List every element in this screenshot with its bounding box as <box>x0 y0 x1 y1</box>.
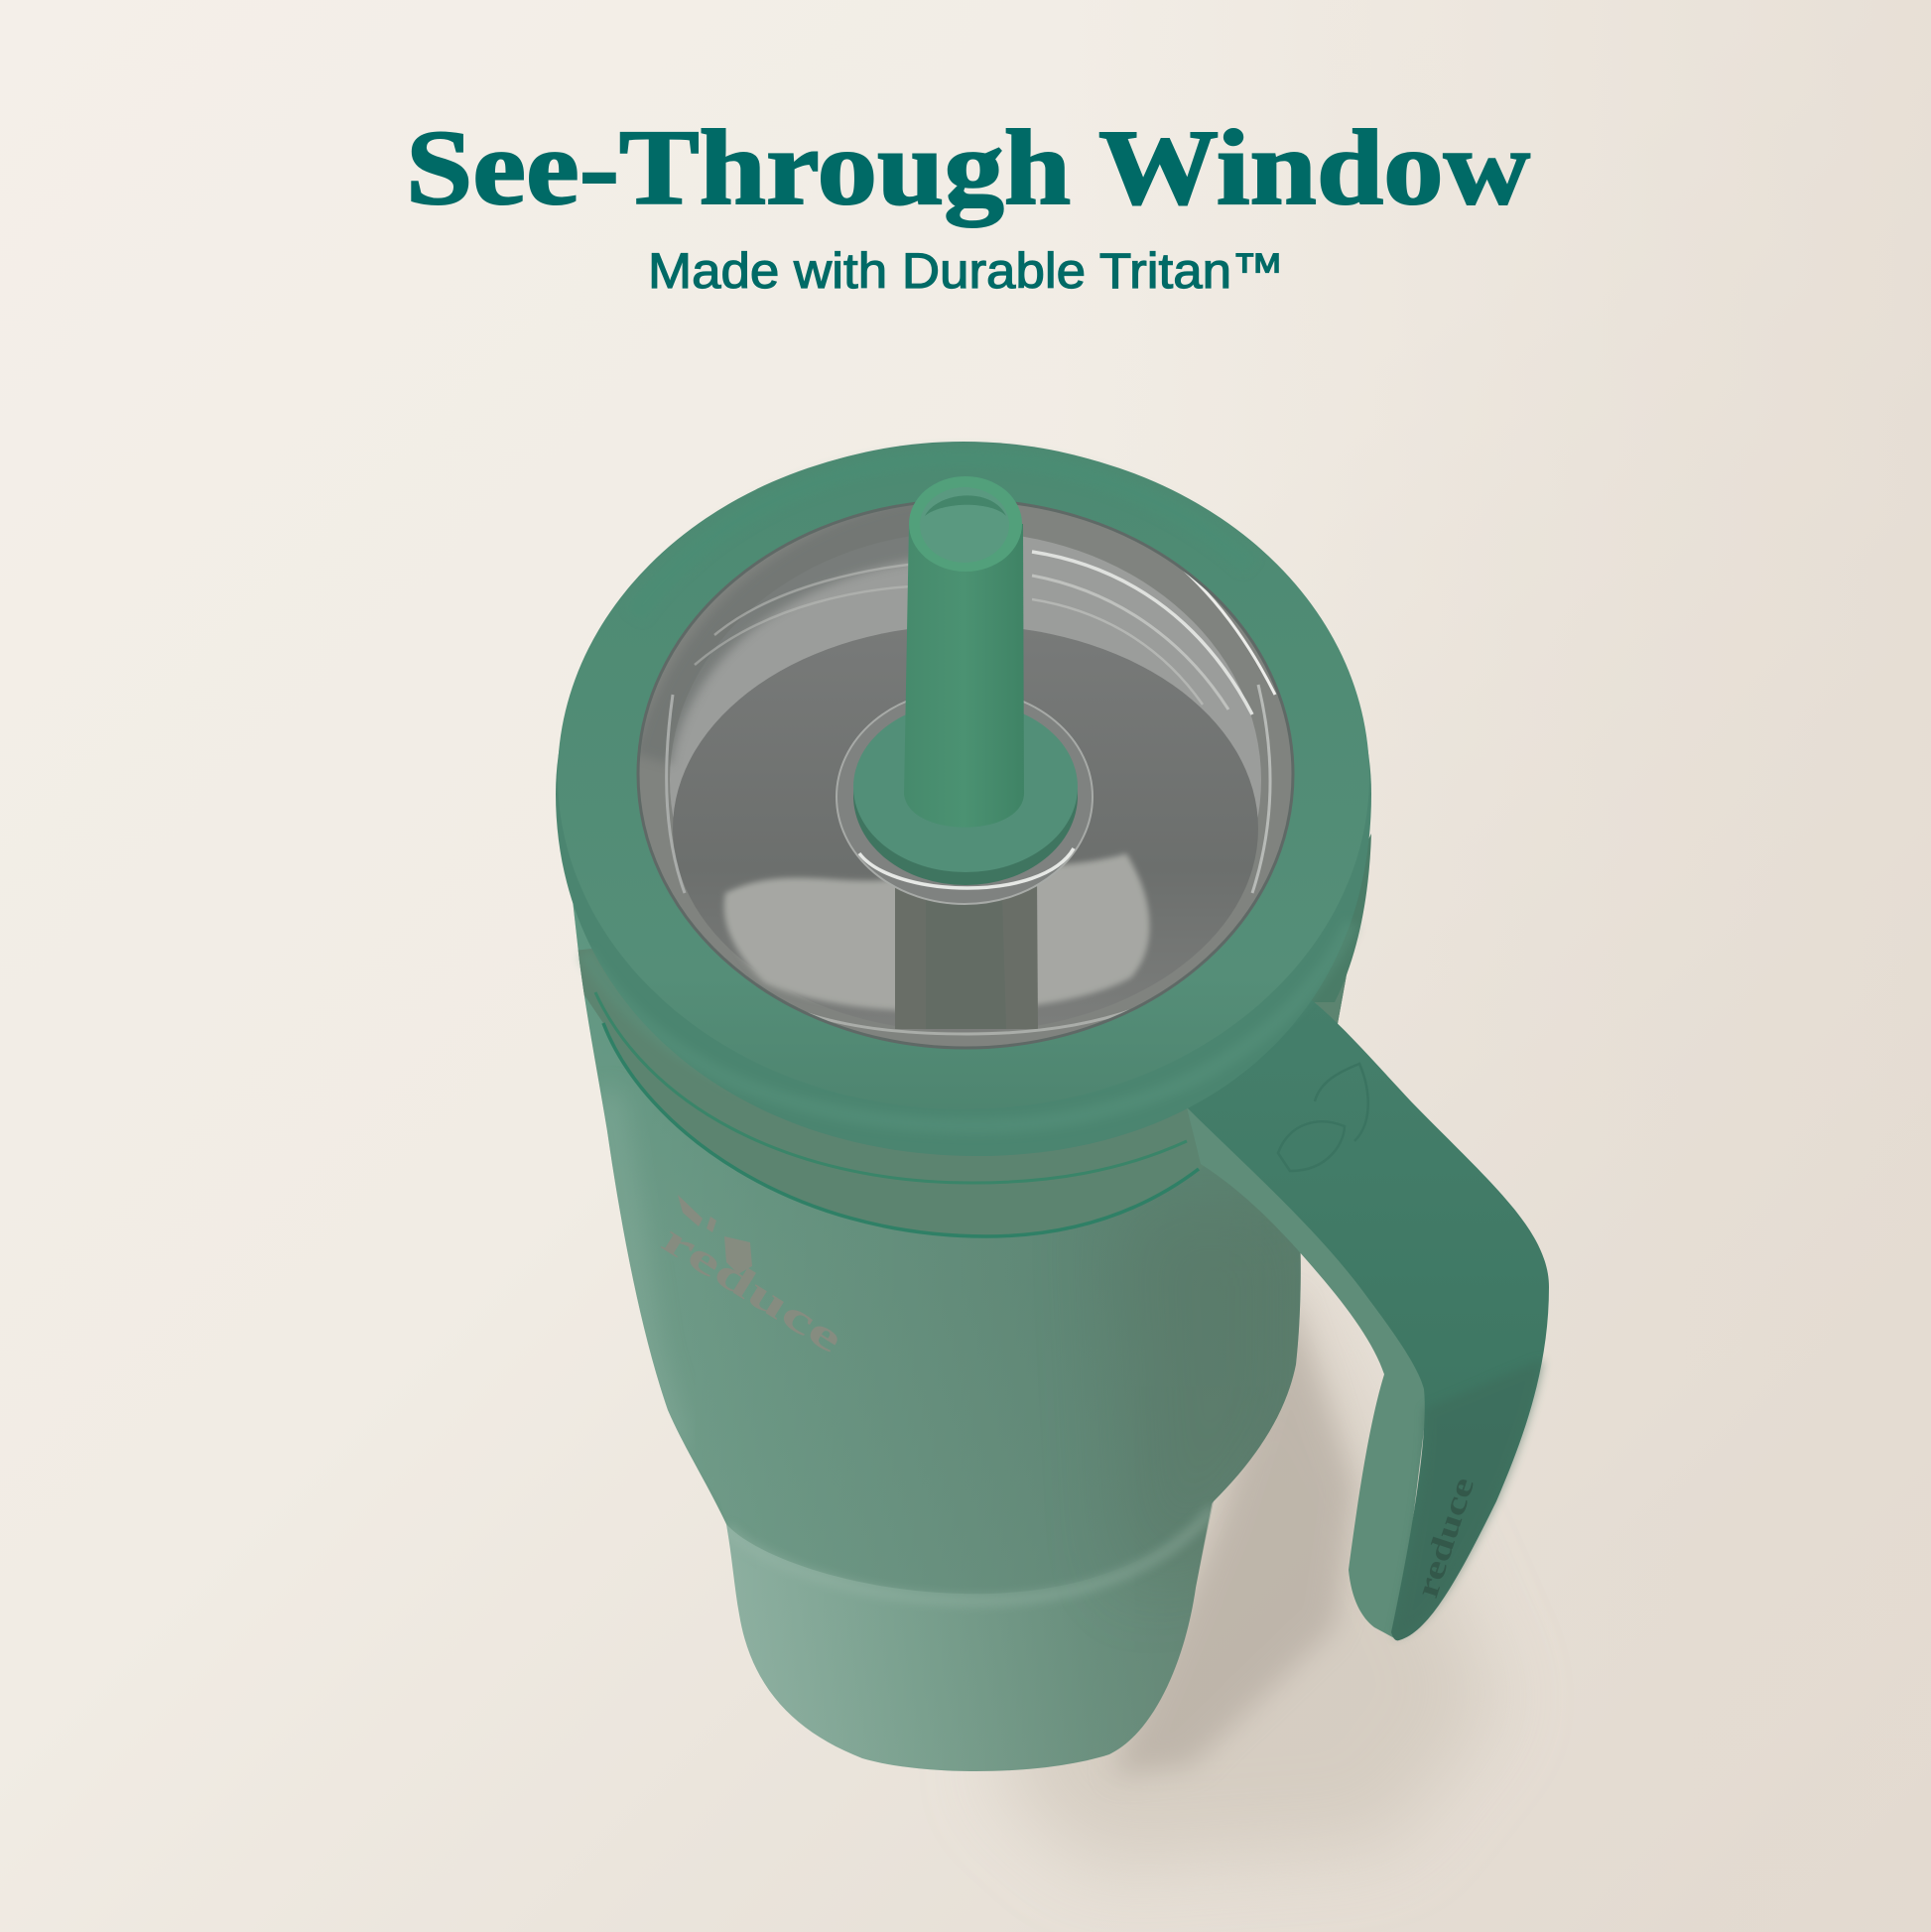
upper left dark sector <box>641 505 913 764</box>
tumbler body <box>556 834 1389 1786</box>
lid <box>556 442 1371 1156</box>
window rim <box>638 500 1293 1048</box>
title: See-Through Window <box>406 109 1530 227</box>
subtitle: Made with Durable Tritan™ <box>648 243 1284 299</box>
window base <box>638 500 1293 1048</box>
handle wordmark: reduce <box>1408 1473 1480 1602</box>
straw reflection <box>895 873 1038 1029</box>
body tint <box>573 903 1347 1610</box>
left rim highlight <box>667 695 685 893</box>
floor reflection <box>724 853 1150 1011</box>
icon: leaf on handle <box>1278 1064 1368 1171</box>
bottom glass rim <box>808 1009 1129 1036</box>
handle <box>1141 995 1549 1640</box>
right collar sliver <box>1290 834 1371 1002</box>
cup floor <box>673 625 1258 1032</box>
logo mark <box>678 1195 752 1274</box>
straw <box>904 476 1024 828</box>
straw shaft <box>904 524 1024 828</box>
disc edge <box>853 707 1078 885</box>
infographic canvas <box>411 0 1931 1932</box>
lid top highlight <box>635 458 1250 615</box>
engraved logo on body <box>654 1195 850 1362</box>
handle front face <box>1141 995 1549 1640</box>
cast shadow <box>992 1240 1498 1866</box>
handle inner face <box>1187 1107 1429 1640</box>
handle lower shade <box>1394 1359 1543 1637</box>
lid lower edge highlight <box>585 923 1352 1126</box>
lid side wall <box>556 442 1371 1156</box>
glass ring <box>837 690 1093 904</box>
collar line <box>603 1023 1199 1236</box>
see-through window <box>635 496 1293 1048</box>
straw opening <box>920 487 1009 563</box>
upper threaded wall <box>670 536 1261 817</box>
upper body <box>570 873 1361 1594</box>
lid top face <box>558 443 1369 1109</box>
straw grommet <box>837 690 1093 904</box>
logo wordmark: reduce <box>654 1216 850 1362</box>
collar band <box>578 949 1346 1234</box>
lower body <box>716 1469 1219 1771</box>
thread rings <box>694 550 1276 715</box>
green disc <box>853 702 1078 872</box>
collar upper line <box>595 992 1187 1183</box>
right rim highlight <box>1252 685 1270 893</box>
straw rim <box>909 476 1022 572</box>
